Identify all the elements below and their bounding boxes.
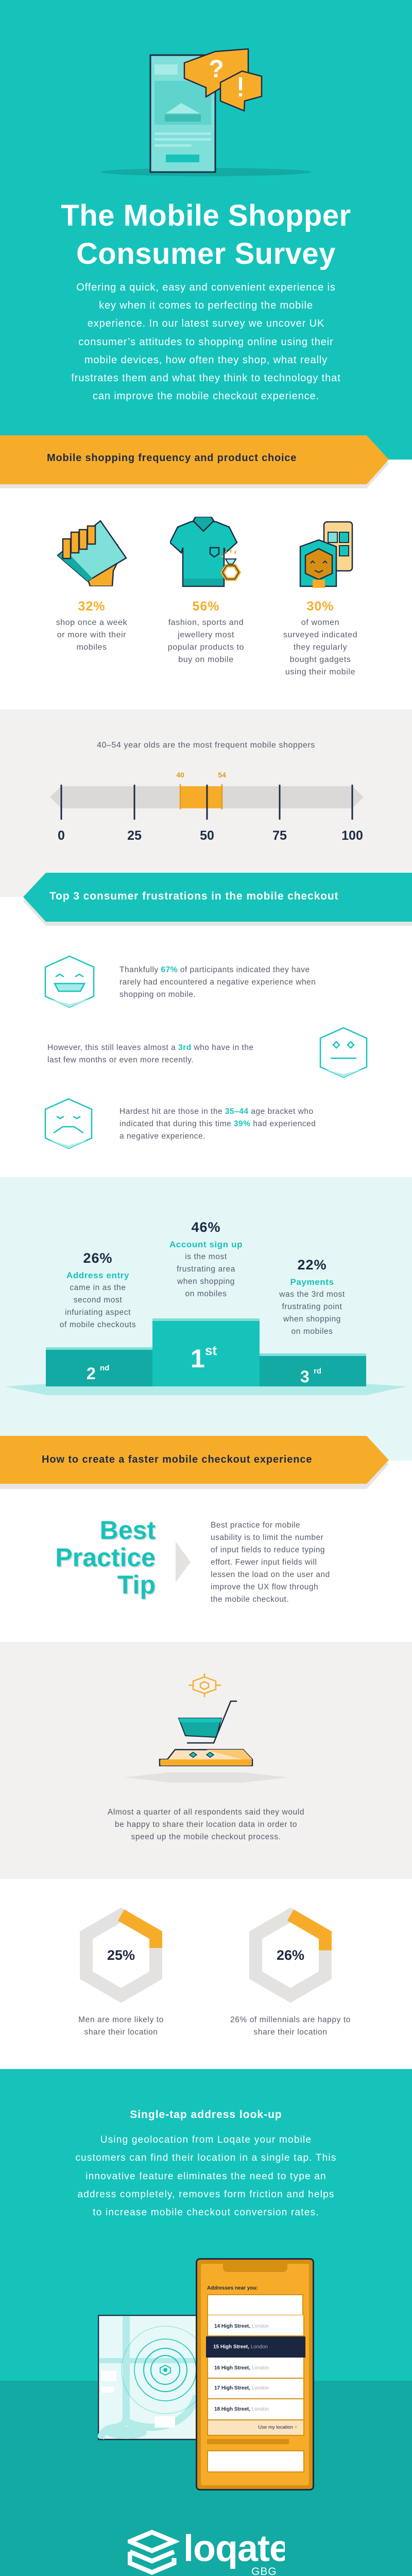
icon: phone with speech bubbles: ? xyxy=(209,56,224,83)
chart: age range scale: 40 xyxy=(176,771,184,779)
chart: age range scale xyxy=(50,771,364,843)
text: a 3rd: last few months or even more recently. xyxy=(47,1056,194,1064)
heading: single-tap lookup: Single-tap address look-up xyxy=(130,2109,282,2121)
intro paragraph: Offering a quick, easy and convenient experience is xyxy=(76,282,336,293)
background: hero teal xyxy=(0,0,412,460)
podium stat: 46%: on mobiles xyxy=(185,1290,227,1298)
stat: 30%: bought gadgets xyxy=(290,655,351,664)
text: location quarter: speed up the mobile checkout process. xyxy=(131,1833,281,1841)
text: location quarter: be happy to share their location data in order to xyxy=(115,1820,297,1829)
chart: 26% hexagon donut: 26% xyxy=(277,1947,304,1963)
icon: map with location rings xyxy=(98,2315,196,2440)
chart: podium: nd xyxy=(100,1364,109,1372)
icon: phone with speech bubbles xyxy=(100,48,312,176)
text: lookup paragraph: Using geolocation from Loqate your mobile xyxy=(100,2134,312,2145)
stat: 32%: mobiles xyxy=(76,643,107,652)
intro paragraph xyxy=(71,282,341,402)
list: address rows xyxy=(206,2315,305,2436)
title: Consumer Survey xyxy=(76,237,336,270)
stat: 30%: using their mobile xyxy=(285,668,355,676)
chart: 26% hexagon donut xyxy=(230,1907,351,2037)
list: address rows: Use my location ⌖ xyxy=(258,2425,297,2430)
background: podium light teal xyxy=(0,1177,412,1461)
text: best practice xyxy=(211,1521,330,1604)
stat: 56%: fashion, sports and xyxy=(168,618,244,627)
background: footer dark teal xyxy=(0,2381,412,2576)
list: address rows: 18 High Street, London xyxy=(214,2406,269,2412)
background: age gray xyxy=(0,709,412,897)
banner: top 3 frustrations: Top 3 consumer frustrations in the mobile checkout xyxy=(49,890,339,902)
podium stat: 46%: is the most xyxy=(185,1252,227,1261)
logo: loqate GBG xyxy=(128,2528,285,2576)
chart: age range scale: 25 xyxy=(127,828,142,843)
list: address rows: 15 High Street, London xyxy=(213,2344,268,2350)
chart: podium: rd xyxy=(314,1367,321,1376)
icon: happy face hexagon xyxy=(44,955,95,1008)
text: 67% xyxy=(119,965,316,999)
stat: 56%: popular products to xyxy=(168,643,244,652)
intro paragraph: consumer’s attitudes to shopping online using their xyxy=(78,336,334,348)
heading: best practice tip xyxy=(55,1516,157,1600)
chart: age range scale: 54 xyxy=(218,771,226,779)
podium stat: 22%: 22% xyxy=(297,1257,327,1273)
age caption: 40–54 year olds are the most frequent mobile shoppers xyxy=(97,741,315,750)
banner: mobile shopping frequency: Mobile shopping frequency and product choice xyxy=(47,452,297,464)
text: best practice: Best practice for mobile xyxy=(211,1521,300,1530)
podium stat: 22% xyxy=(279,1257,345,1336)
stat: 30% xyxy=(283,599,357,676)
text: 35-44 xyxy=(119,1107,316,1141)
intro paragraph: can improve the mobile checkout experience. xyxy=(93,391,319,402)
text: best practice: the mobile checkout. xyxy=(211,1595,289,1604)
chart: 25% hexagon donut: 25% xyxy=(107,1947,135,1963)
podium stat: 26%: Address entry xyxy=(66,1270,129,1280)
stat: 56%: jewellery most xyxy=(178,631,234,639)
text: best practice: lessen the load on the user and xyxy=(211,1570,330,1579)
podium stat: 22%: was the 3rd most xyxy=(279,1290,345,1299)
chart: podium xyxy=(5,1318,407,1395)
chart: age range scale: 0 xyxy=(58,828,65,843)
stat: 30%: 30% xyxy=(306,599,334,614)
chart: podium: 3 xyxy=(300,1367,310,1386)
podium stat: 46% xyxy=(169,1219,243,1298)
stat: 56%: 56% xyxy=(192,599,220,614)
chart: age range scale: 100 xyxy=(341,828,363,843)
text: 35-44: Hardest hit are those in the 35–44 age bracket who xyxy=(119,1107,314,1116)
title xyxy=(61,199,351,270)
text: 35-44: a negative experience. xyxy=(119,1132,205,1141)
podium stat: 26%: 26% xyxy=(83,1250,113,1266)
icon: phone address list xyxy=(196,2258,314,2490)
title: The Mobile Shopper xyxy=(61,199,351,232)
text: lookup paragraph: innovative feature eliminates the need to type an xyxy=(85,2171,327,2182)
banner: faster checkout xyxy=(0,1436,389,1489)
chart: 25% hexagon donut: Men are more likely to xyxy=(78,2015,164,2024)
podium stat: 46%: 46% xyxy=(191,1219,221,1235)
banner: faster checkout: How to create a faster mobile checkout experience xyxy=(42,1454,312,1465)
podium stat: 26%: second most xyxy=(74,1296,122,1304)
text: 35-44: indicated that during this time 39% had experienced xyxy=(119,1120,316,1128)
podium stat: 26%: came in as the xyxy=(70,1283,126,1292)
icon: polo shirt and ring xyxy=(170,517,241,587)
icon: sad face hexagon xyxy=(44,1098,93,1149)
background: location gray xyxy=(0,1642,412,1879)
text: location quarter xyxy=(108,1808,304,1841)
intro paragraph: experience. In our latest survey we uncover UK xyxy=(88,318,324,329)
list: address rows: 16 High Street, London xyxy=(214,2365,269,2371)
text: lookup paragraph: address completely, removes form friction and helps xyxy=(77,2189,335,2200)
podium stat: 22%: Payments xyxy=(290,1277,334,1287)
chart: podium: st xyxy=(205,1343,217,1358)
icon: neutral face hexagon xyxy=(319,1027,368,1078)
text: best practice: effort. Fewer input fields will xyxy=(211,1558,317,1567)
chart: age range scale: 50 xyxy=(200,828,214,843)
stat: 32%: shop once a week xyxy=(56,618,127,627)
list: address rows: 14 High Street, London xyxy=(214,2324,269,2329)
intro paragraph: mobile devices, how often they shop, what really xyxy=(84,354,328,366)
icon: hand holding phone xyxy=(57,520,127,586)
text: location quarter: Almost a quarter of all respondents said they would xyxy=(108,1808,304,1817)
text: 67%: rarely had encountered a negative experience when xyxy=(119,978,316,987)
text: lookup paragraph xyxy=(75,2134,337,2218)
stat: 32%: or more with their xyxy=(57,631,126,639)
podium stat: 46%: Account sign up xyxy=(169,1240,243,1249)
text: lookup paragraph: customers can find their location in a single tap. This xyxy=(75,2153,337,2163)
chart: 25% hexagon donut: share their location xyxy=(84,2028,158,2037)
podium stat: 26%: infuriating aspect xyxy=(65,1308,131,1317)
chart: 25% hexagon donut xyxy=(78,1907,164,2037)
text: best practice: improve the UX flow through xyxy=(211,1583,318,1591)
podium stat: 46%: when shopping xyxy=(177,1277,235,1286)
text: lookup paragraph: to increase mobile checkout conversion rates. xyxy=(93,2207,319,2218)
stat: 56%: buy on mobile xyxy=(178,655,234,664)
podium stat: 22%: on mobiles xyxy=(291,1327,333,1336)
heading: best practice tip: Tip xyxy=(117,1570,156,1599)
chart: podium: 1 xyxy=(191,1344,205,1373)
stat: 30%: surveyed indicated xyxy=(283,631,357,639)
text: best practice: of input fields to reduce typing xyxy=(211,1546,325,1554)
text: 67%: Thankfully 67% of participants indicated they have xyxy=(119,965,310,974)
stat: 32%: 32% xyxy=(78,599,106,614)
icon: woman with smartwatch xyxy=(300,521,353,588)
stat: 32% xyxy=(56,599,127,652)
label: addresses near you: Addresses near you: xyxy=(207,2285,258,2291)
text: a 3rd: However, this still leaves almost a 3rd who have in the xyxy=(47,1043,254,1052)
chart: age range scale: 75 xyxy=(272,828,287,843)
podium stat: 26% xyxy=(60,1250,136,1329)
podium stat: 22%: when shopping xyxy=(283,1315,341,1324)
stat: 30%: they regularly xyxy=(294,643,347,652)
heading: best practice tip: Best xyxy=(100,1516,156,1545)
podium stat: 22%: frustrating point xyxy=(282,1302,342,1311)
stat: 56% xyxy=(168,599,244,664)
banner: mobile shopping frequency xyxy=(0,435,389,488)
podium stat: 46%: frustrating area xyxy=(177,1265,235,1274)
intro paragraph: key when it comes to perfecting the mobile xyxy=(99,300,313,311)
stat: 30%: of women xyxy=(301,618,339,627)
podium stat: 26%: of mobile checkouts xyxy=(60,1320,136,1329)
background: lookup teal xyxy=(0,2069,412,2381)
chart: podium: 2 xyxy=(87,1364,96,1383)
list: address rows: 17 High Street, London xyxy=(214,2385,269,2391)
text: best practice: usability is to limit the number xyxy=(211,1533,323,1542)
heading: best practice tip: Practice xyxy=(55,1543,156,1572)
chart: 26% hexagon donut: 26% of millennials are happy to xyxy=(230,2015,351,2024)
intro paragraph: frustrates them and what they think to technology that xyxy=(71,372,341,384)
text: 67%: shopping on mobile. xyxy=(119,990,196,999)
banner: top 3 frustrations xyxy=(23,873,412,926)
arrow: gray triangle xyxy=(176,1541,191,1582)
text: a 3rd xyxy=(47,1043,254,1064)
icon: location target over cart and phone xyxy=(125,1673,287,1783)
chart: 26% hexagon donut: share their location xyxy=(254,2028,327,2037)
